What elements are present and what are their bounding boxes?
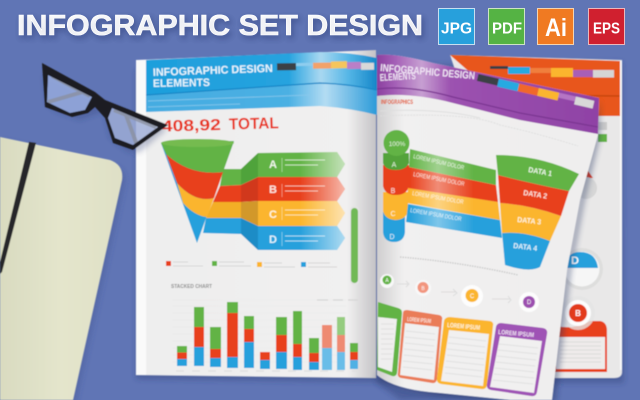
blue header [146, 52, 377, 115]
data label 3: DATA 3 [517, 215, 542, 226]
right lens [108, 108, 158, 145]
bar 1 [177, 346, 187, 366]
badge PDF: PDF [492, 20, 522, 38]
stacked cylinder: B [391, 188, 396, 195]
bar 2 [194, 307, 204, 366]
arrow A to B [397, 281, 409, 287]
ribbon highlight [406, 149, 502, 238]
header colour tabs [277, 61, 374, 71]
data label 2: DATA 2 [523, 188, 548, 201]
front right page [377, 55, 599, 400]
purple header colour tabs [477, 74, 594, 109]
dotted line [400, 257, 518, 275]
step C [461, 285, 483, 307]
back page circle B [561, 296, 595, 330]
badge JPG: JPG [441, 20, 472, 38]
stacked cylinder: 100% [389, 141, 406, 148]
bar 12 [350, 343, 358, 369]
stacked cylinder: D [389, 234, 395, 241]
badge EPS [588, 8, 624, 44]
bar 9 [309, 338, 319, 370]
lens reflections [48, 76, 156, 145]
funnel chart [161, 139, 234, 243]
ribbon blue: LOREM IPSUM DOLOR [410, 208, 462, 223]
data label 4: DATA 4 [513, 241, 538, 253]
back page colour tabs [490, 66, 614, 78]
main title: INFOGRAPHIC SET DESIGN [17, 10, 423, 42]
ribbon A: A [269, 159, 277, 171]
data label 1: DATA 1 [528, 165, 553, 178]
bar 6 [260, 352, 270, 369]
front page cast shadow [377, 100, 600, 400]
ribbon C: C [269, 209, 277, 221]
total figure: 408,92 [162, 117, 221, 135]
stacked chart [172, 300, 358, 371]
purple header second line: ELEMENTS [380, 71, 416, 84]
ribbon arrows [203, 152, 345, 250]
card purple [487, 323, 547, 396]
badge Ai: Ai [545, 14, 567, 42]
badge Ai [538, 8, 574, 44]
card green [377, 302, 402, 376]
chart legend dots [317, 299, 358, 301]
ribbon D [258, 226, 345, 250]
bar 11 [337, 317, 345, 370]
notebook [0, 137, 125, 400]
card yellow [437, 317, 493, 389]
header title: INFOGRAPHIC DESIGN [153, 63, 273, 79]
bar 8 [293, 311, 302, 370]
step B: B [421, 286, 425, 292]
bar 4 [227, 302, 238, 368]
purple header title: INFOGRAPHIC DESIGN [380, 62, 475, 82]
section heading: INFOGRAPHICS [381, 100, 413, 106]
step D: D [527, 300, 532, 306]
bar 7 [276, 317, 287, 369]
header subtext [148, 95, 310, 107]
purple header [377, 55, 599, 134]
purple header fold line [377, 88, 598, 127]
stacked cylinder: A [392, 162, 397, 169]
back page on the right [450, 55, 622, 378]
slanted ribbons [406, 149, 502, 238]
badge JPG [438, 8, 474, 44]
data funnel [496, 155, 579, 270]
back page circle fragment [575, 168, 597, 199]
ribbon B [258, 177, 345, 201]
card salmon [398, 310, 442, 383]
back page small squares [598, 122, 607, 142]
legend [166, 261, 337, 267]
bar 5 [244, 316, 254, 368]
left lens [47, 75, 92, 113]
step D [519, 292, 539, 312]
ribbon green: LOREM IPSUM DOLOR [413, 154, 465, 172]
ribbon connector segments [203, 153, 258, 250]
arrow B to C [441, 289, 457, 296]
ribbon red: LOREM IPSUM DOLOR [413, 172, 465, 188]
step C: C [470, 294, 475, 300]
total figure [162, 115, 279, 135]
step B [415, 280, 431, 296]
step A [380, 274, 394, 288]
badge PDF [488, 8, 524, 44]
step circles [380, 274, 539, 312]
back page circle D [561, 248, 603, 290]
back page circle B: B [575, 309, 581, 318]
ribbon D: D [269, 234, 277, 246]
card yellow: LOREM IPSUM [447, 322, 480, 332]
back page circle D: D [571, 255, 579, 267]
stacked cylinder [383, 130, 410, 242]
badge EPS: EPS [593, 20, 620, 38]
file format badges [438, 8, 624, 44]
glasses [42, 63, 168, 152]
stacked cylinder: C [390, 211, 396, 218]
arrow C to D [492, 296, 511, 303]
chart title: STACKED CHART [171, 284, 213, 290]
frame [42, 63, 168, 150]
step A: A [385, 278, 389, 284]
left page [136, 50, 377, 378]
ribbon C [258, 201, 345, 226]
bar 10 [322, 325, 332, 370]
back page red card [555, 321, 607, 372]
brochure shadow [136, 62, 624, 400]
fade over ribbon arrows [300, 152, 345, 250]
total figure: TOTAL [229, 115, 279, 133]
card salmon: LOREM IPSUM [407, 317, 431, 325]
header title second line: ELEMENTS [153, 77, 210, 90]
ribbon B: B [269, 184, 277, 196]
intro text lines [380, 110, 578, 146]
bar 3 [210, 327, 221, 367]
card purple: LOREM IPSUM [498, 329, 534, 339]
vertical progress bar [350, 206, 360, 285]
ribbon yellow: LOREM IPSUM DOLOR [412, 191, 464, 206]
ribbon A [258, 152, 345, 177]
